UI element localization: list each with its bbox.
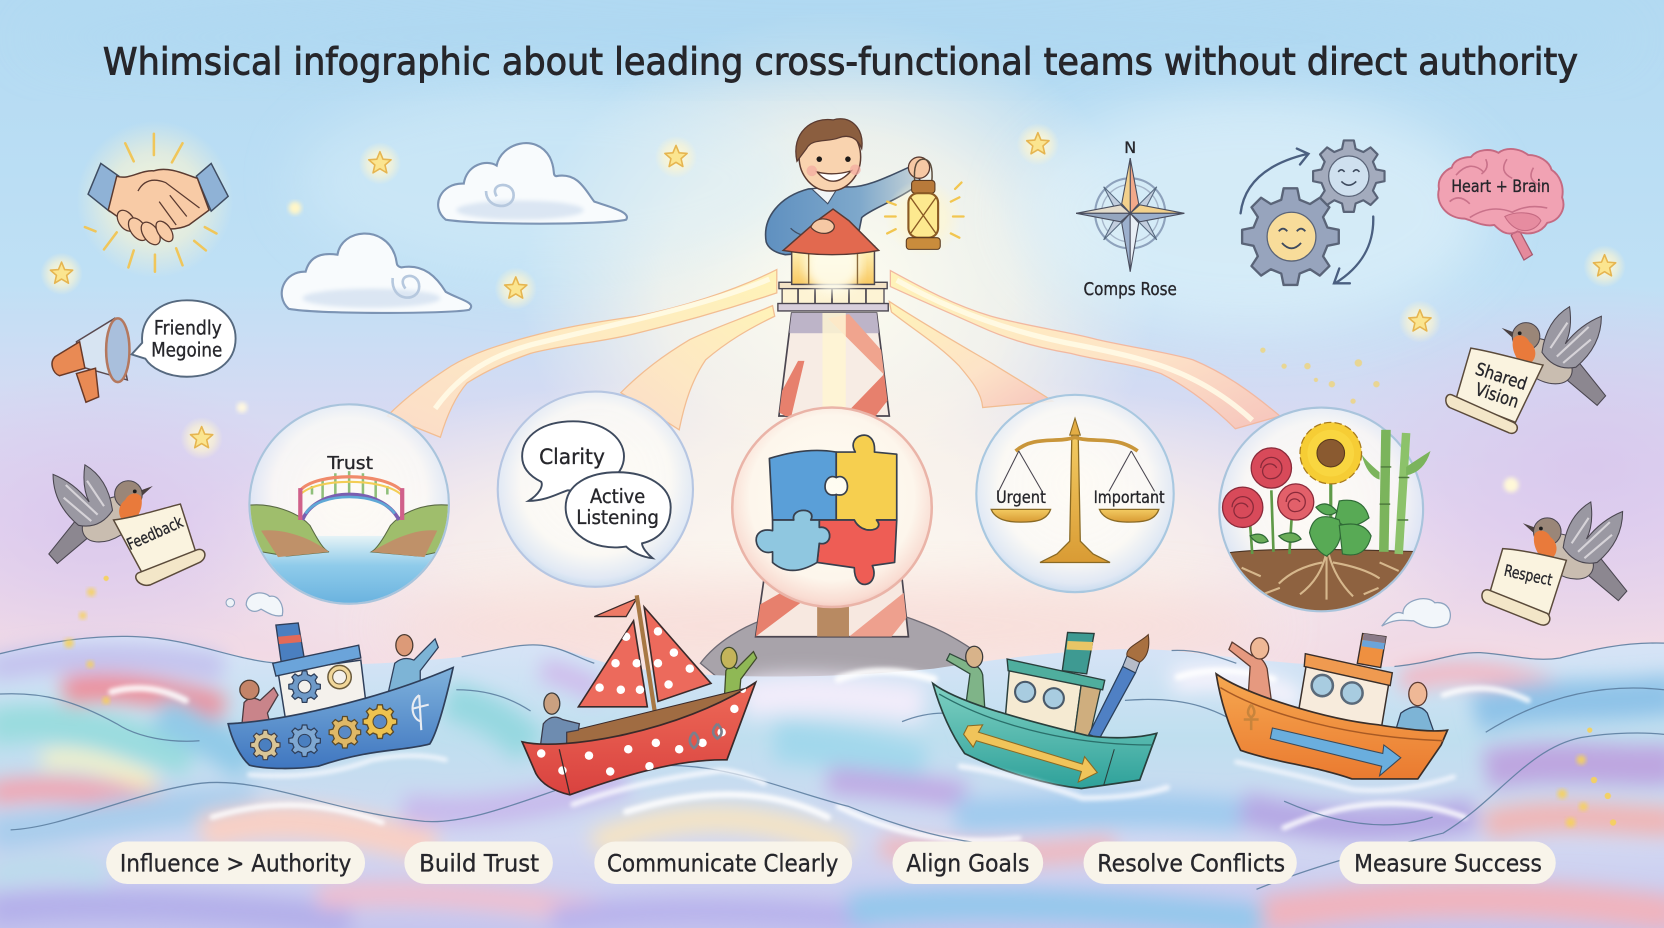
scroll: shared vision — [1446, 348, 1543, 433]
mint plant — [1310, 500, 1371, 556]
foam around hulls — [249, 756, 1454, 804]
figure — [721, 647, 757, 709]
face — [807, 156, 861, 181]
smoke — [1382, 599, 1450, 628]
funnel — [276, 623, 305, 662]
icon: compass rose: Comps Rose — [1084, 280, 1177, 300]
bird with shared vision scroll — [1446, 307, 1606, 433]
funnel — [1062, 632, 1094, 674]
arrow — [964, 725, 1097, 782]
raised hand — [908, 157, 930, 178]
figure — [1229, 638, 1271, 700]
speech bubble: clarity: Clarity — [539, 445, 605, 470]
scroll: shared vision: Vision — [1473, 380, 1521, 413]
sea background — [0, 636, 1664, 928]
pill: communicate clearly — [594, 842, 852, 884]
scroll: feedback — [114, 504, 205, 585]
pill: measure success: Measure Success — [1354, 848, 1542, 877]
hanging lantern — [885, 159, 964, 256]
pill: influence — [106, 842, 365, 884]
pill: align goals: Align Goals — [906, 848, 1029, 877]
icon: compass rose: N — [1124, 138, 1136, 157]
bubble: scales urgent important: Important — [1094, 488, 1165, 508]
cloud upper — [438, 143, 627, 224]
icon: compass rose — [1076, 138, 1184, 300]
figure — [947, 646, 985, 709]
rocky island — [700, 616, 982, 690]
soil and roots — [1230, 548, 1413, 610]
sweater — [766, 166, 921, 255]
roses — [1223, 448, 1314, 554]
arrow — [1270, 728, 1401, 776]
speech bubble: friendly megaphone: Megoine — [151, 339, 222, 362]
puzzle pieces — [756, 435, 897, 584]
balance scale — [991, 418, 1159, 562]
label pills — [106, 842, 1556, 884]
red roof — [783, 209, 879, 255]
cabin — [278, 660, 366, 726]
bubble: scales urgent important — [976, 395, 1174, 592]
hull — [228, 668, 453, 768]
bamboo — [1362, 430, 1431, 554]
bubble: garden growth — [1219, 408, 1431, 616]
paintbrush — [1089, 635, 1149, 739]
hull — [522, 682, 756, 795]
collar — [812, 187, 838, 204]
boat: orange tug — [1216, 599, 1450, 779]
hull — [933, 683, 1157, 788]
lantern room — [792, 238, 874, 293]
gold sparkles — [64, 348, 1616, 827]
figure — [388, 635, 438, 692]
speech bubble: clarity — [522, 421, 624, 501]
pill: influence: Influence > Authority — [120, 848, 351, 877]
bubble: trust bridge — [249, 404, 451, 610]
bubble: trust bridge: Trust — [326, 453, 373, 474]
pill: measure success — [1339, 842, 1556, 884]
speech bubble: active listening: Active — [590, 485, 645, 508]
lighthouse — [700, 209, 982, 690]
sunflower — [1300, 422, 1362, 552]
wave lines — [0, 636, 1664, 889]
smoke — [226, 593, 283, 616]
pill: build trust: Build Trust — [419, 848, 539, 877]
figure — [539, 693, 579, 762]
speech bubble: active listening — [566, 472, 671, 558]
hand on roof — [811, 219, 834, 233]
cabin — [1299, 664, 1389, 732]
speech bubble: active listening: Listening — [576, 506, 659, 529]
pill: build trust — [404, 842, 553, 884]
rainbow bridge — [300, 471, 402, 520]
boat: red polka-dot sailboat — [522, 595, 757, 795]
bubble: scales urgent important: Urgent — [996, 488, 1046, 508]
pill: resolve conflicts: Resolve Conflicts — [1097, 848, 1285, 877]
sails — [577, 595, 712, 710]
icon: handshake — [76, 121, 233, 278]
icon: heart and brain: Heart + Brain — [1451, 177, 1550, 197]
tower lower — [756, 578, 908, 637]
scroll: respect — [1482, 549, 1566, 625]
tower upper — [778, 312, 890, 417]
head — [799, 123, 861, 191]
icon: friendly megaphone — [52, 318, 129, 402]
lantern keeper — [766, 119, 930, 255]
pill: align goals — [892, 842, 1043, 884]
speech bubble: friendly megaphone: Friendly — [154, 316, 222, 339]
balcony — [778, 282, 888, 311]
deck — [557, 688, 748, 751]
hair — [796, 119, 862, 161]
cloud lower — [282, 234, 471, 313]
icon: smiling gears cycle — [1241, 140, 1385, 285]
pill: resolve conflicts — [1084, 842, 1297, 884]
icon: heart and brain — [1438, 149, 1563, 260]
cabin — [1005, 671, 1081, 738]
title: Whimsical infographic about leading cross-functional teams without direct authority — [103, 40, 1578, 83]
figure — [1394, 682, 1435, 734]
bubble: puzzle — [732, 408, 932, 607]
star decorations — [40, 123, 1626, 492]
scroll: respect: Respect — [1502, 561, 1554, 589]
bird with respect scroll — [1482, 502, 1627, 625]
hull — [1216, 674, 1448, 779]
boat: blue steamer — [226, 593, 453, 768]
boat: teal tug with paintbrush — [933, 632, 1157, 788]
figure — [240, 680, 278, 724]
scroll: feedback: Feedback — [124, 512, 186, 554]
scroll: shared vision: Shared — [1473, 360, 1529, 395]
bird with feedback scroll — [49, 465, 205, 585]
bubble: clarity and active listening — [498, 392, 693, 587]
pill: communicate clearly: Communicate Clearly — [607, 848, 838, 877]
funnel — [1357, 634, 1386, 668]
light beams from lighthouse to bubbles — [387, 270, 1280, 437]
speech bubble: friendly megaphone — [132, 300, 236, 377]
